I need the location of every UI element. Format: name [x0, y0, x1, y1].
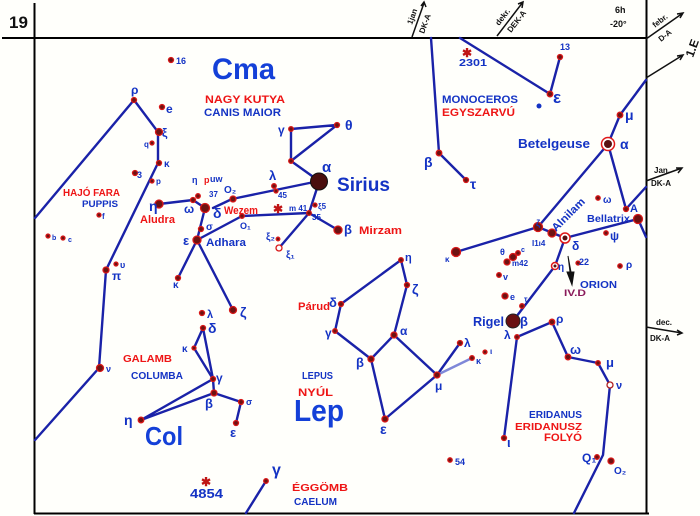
greek letter labels: α — [400, 324, 408, 338]
greek letter labels: μ — [435, 379, 442, 393]
coordinate arrows: dekr. — [493, 7, 512, 27]
names: Orion: ORION — [580, 280, 617, 291]
greek letter labels: β — [205, 396, 213, 411]
coordinate arrows: DK-A — [651, 179, 671, 188]
black arrow IV.D — [567, 256, 574, 285]
greek letter labels: μ — [606, 355, 614, 370]
catalog labels: 35 — [312, 213, 321, 222]
constellation lines: Lepus — [335, 260, 472, 419]
star names: Mirzam — [359, 225, 402, 237]
variable star marks: ✱ — [462, 46, 472, 60]
names: Lepus: NYÚL — [298, 386, 333, 399]
names: Columba — [123, 354, 183, 382]
greek letter labels: f — [102, 212, 105, 221]
greek letter labels: γ — [325, 326, 332, 340]
names: Lepus — [298, 371, 333, 399]
star names — [140, 136, 630, 329]
star names: Sirius — [337, 175, 390, 196]
greek letter labels: η — [558, 262, 564, 273]
names: Lepus: LEPUS — [302, 371, 333, 382]
variable star marks: ✱ — [273, 202, 283, 216]
greek letter labels: η — [149, 198, 158, 214]
catalog labels — [137, 42, 589, 501]
greek letter labels: e — [166, 102, 173, 116]
greek letter labels: γ — [272, 462, 281, 479]
coordinate arrows: DEK-A — [505, 9, 528, 34]
greek letter labels: τ — [524, 295, 528, 304]
greek letter labels: ι — [507, 435, 511, 450]
catalog labels: m42 — [512, 259, 529, 268]
catalog labels: m 41 — [289, 204, 308, 213]
greek letter labels: κ — [182, 344, 188, 355]
stars: Betelgeuse — [602, 138, 614, 150]
greek letter labels: b — [52, 235, 56, 242]
constellation lines: Columba — [141, 328, 241, 423]
greek letter labels: η — [192, 175, 198, 185]
greek letter labels: c — [521, 247, 525, 254]
greek letter labels: ε — [183, 233, 189, 248]
greek letter labels: β — [424, 154, 433, 170]
greek letter labels: p — [156, 177, 161, 186]
catalog labels: 2301 — [459, 58, 488, 69]
catalog labels: 3 — [137, 170, 142, 180]
stars: Rigel — [506, 314, 520, 328]
greek letter labels: δ — [572, 239, 579, 253]
greek letter labels: ζ — [536, 218, 540, 228]
greek letter labels: κ — [476, 356, 482, 366]
names: Canis Major: CANIS MAIOR — [204, 107, 281, 119]
catalog labels: 4854 — [190, 486, 224, 501]
names: Puppis: PUPPIS — [82, 199, 118, 209]
coordinate arrows: dec. — [656, 318, 672, 327]
constellation title: Lep: Lep — [294, 393, 344, 428]
constellation lines: Monoceros — [431, 38, 560, 180]
greek letter labels: ζ — [412, 281, 419, 297]
names: Monoceros: MONOCEROS — [442, 94, 518, 106]
greek letter labels: β — [356, 355, 364, 370]
greek letter labels: ψ — [610, 229, 619, 243]
names: Caelum — [292, 481, 348, 508]
coordinate arrows: 6h — [615, 5, 626, 15]
greek letter labels: δ — [208, 320, 216, 336]
names: Caelum: ÉGGÖMB — [292, 481, 348, 494]
greek letter labels: κ — [173, 280, 179, 291]
greek letter labels: ω — [603, 195, 612, 206]
coordinate arrows: D-A — [657, 28, 674, 44]
coordinate arrows: DK-A — [650, 334, 670, 343]
greek letter labels: ρ — [626, 260, 632, 271]
constellation lines: Caelum — [246, 481, 266, 513]
variable star marks: ✱ — [201, 475, 211, 489]
names: Columba: GALAMB — [123, 354, 172, 365]
names: Eridanus: ERIDANUSZ — [515, 422, 582, 433]
greek letter labels: O₂ — [224, 185, 236, 196]
constellation title: Cma: Cma — [212, 53, 275, 86]
catalog labels: Ι1ι4 — [532, 239, 546, 248]
coordinate arrows: Jan. — [654, 166, 670, 175]
stars: Sirius — [310, 173, 328, 190]
star names: Rigel — [473, 314, 504, 329]
names: Canis Major — [204, 94, 285, 119]
names: Canis Major: NAGY KUTYA — [205, 94, 285, 106]
greek letter labels: q — [144, 140, 149, 149]
greek letter labels: ζ — [240, 304, 247, 320]
greek letter labels: O₁ — [240, 221, 251, 231]
greek letter labels: δ — [213, 205, 222, 221]
stars: Orion ring stars — [276, 233, 613, 388]
greek letter labels: γ — [278, 123, 285, 137]
greek letter labels: ε — [380, 421, 387, 437]
catalog labels: 54 — [455, 457, 465, 467]
variable star marks — [201, 46, 472, 489]
greek letter labels: π — [112, 269, 121, 283]
greek letter labels: η — [405, 252, 412, 264]
greek letter labels: v — [503, 272, 508, 282]
greek letter labels: p — [204, 175, 210, 185]
greek letter labels: uw — [210, 174, 223, 184]
star names: Wezem — [224, 205, 258, 217]
coordinate arrows: 1jan — [405, 7, 419, 26]
greek letter labels: α — [322, 159, 332, 176]
stars: small dots — [46, 54, 628, 483]
catalog labels: ξ5 — [318, 202, 327, 211]
catalog labels: 13 — [560, 42, 570, 52]
constellation lines: Orion — [456, 80, 646, 321]
greek letter labels: ξ₂ — [266, 232, 275, 243]
greek letter labels: O₂ — [614, 466, 626, 477]
greek letter labels: λ — [207, 309, 213, 321]
names: Eridanus: ERIDANUS — [529, 410, 582, 421]
greek letter labels: θ — [500, 247, 505, 257]
greek letter labels: ξ — [162, 126, 168, 140]
greek letter labels: Q₁ — [582, 451, 596, 465]
star names: Alnilam — [550, 196, 588, 234]
greek letter labels: ν — [106, 364, 111, 374]
catalog labels: 45 — [278, 191, 287, 200]
star names: Adhara — [206, 237, 247, 249]
greek letter labels: κ — [164, 159, 170, 170]
greek letter labels: κ — [445, 255, 450, 264]
coordinate arrows: DK-A — [417, 13, 433, 35]
blue dot in Monoceros — [536, 104, 542, 108]
names: Orion: IV.D — [564, 288, 587, 298]
greek letter labels: ε — [553, 88, 561, 107]
coordinate arrows: -20° — [610, 19, 627, 29]
greek letter labels: τ — [470, 176, 477, 192]
star names: Bellatrix — [587, 214, 630, 225]
greek letter labels — [52, 83, 638, 479]
catalog labels: 37 — [209, 190, 218, 199]
greek letter labels: θ — [345, 117, 353, 133]
star names: Betelgeuse — [518, 136, 590, 151]
greek letter labels: λ — [464, 336, 471, 350]
greek letter labels: λ — [269, 168, 277, 183]
star names: Aludra — [140, 214, 176, 226]
greek letter labels: ε — [230, 425, 236, 440]
greek letter labels: ω — [184, 202, 194, 216]
names: Eridanus: FOLYÓ — [544, 431, 582, 444]
names: Monoceros — [442, 94, 518, 119]
constellation lines: Canis Major — [159, 125, 338, 310]
greek letter labels: δ — [329, 295, 337, 310]
greek letter labels: β — [344, 222, 352, 237]
names: Monoceros: EGYSZARVÚ — [442, 106, 515, 119]
greek letter labels: ν — [616, 380, 622, 392]
greek letter labels: λ — [504, 328, 511, 342]
names: Orion — [564, 280, 617, 298]
greek letter labels: ξ₁ — [286, 250, 295, 261]
greek letter labels: σ — [246, 397, 252, 407]
catalog labels: 16 — [176, 56, 186, 66]
names: Columba: COLUMBA — [131, 371, 183, 382]
catalog labels: 22 — [579, 257, 589, 267]
greek letter labels: ρ — [556, 312, 563, 326]
greek letter labels: ρ — [131, 83, 138, 97]
coordinate arrows — [405, 2, 700, 343]
greek letter labels: A — [630, 203, 638, 215]
greek letter labels: ω — [570, 342, 581, 357]
greek letter labels: γ — [216, 371, 223, 385]
greek letter labels: σ — [206, 222, 213, 233]
greek letter labels: μ — [625, 107, 634, 123]
constellation lines: Eridanus — [504, 322, 610, 513]
greek letter labels: β — [520, 314, 528, 329]
hour label 19: 19 — [9, 13, 28, 32]
names: Puppis: HAJÓ FARA — [63, 186, 120, 199]
stars: large dots — [96, 128, 642, 464]
names: Caelum: CAELUM — [294, 497, 337, 508]
greek letter labels: υ — [120, 260, 125, 270]
constellation title: Col: Col — [145, 421, 183, 451]
greek letter labels: α — [620, 136, 629, 152]
names: Puppis — [63, 186, 120, 209]
greek letter labels: c — [68, 237, 72, 244]
greek letter labels: η — [124, 412, 133, 428]
star names: Párud — [298, 301, 330, 313]
names: Eridanus — [515, 410, 582, 444]
greek letter labels: e — [510, 292, 515, 302]
constellation lines: Puppis — [35, 100, 158, 440]
greek letter labels: ι — [490, 347, 492, 356]
coordinate arrows: febr. — [651, 12, 670, 30]
